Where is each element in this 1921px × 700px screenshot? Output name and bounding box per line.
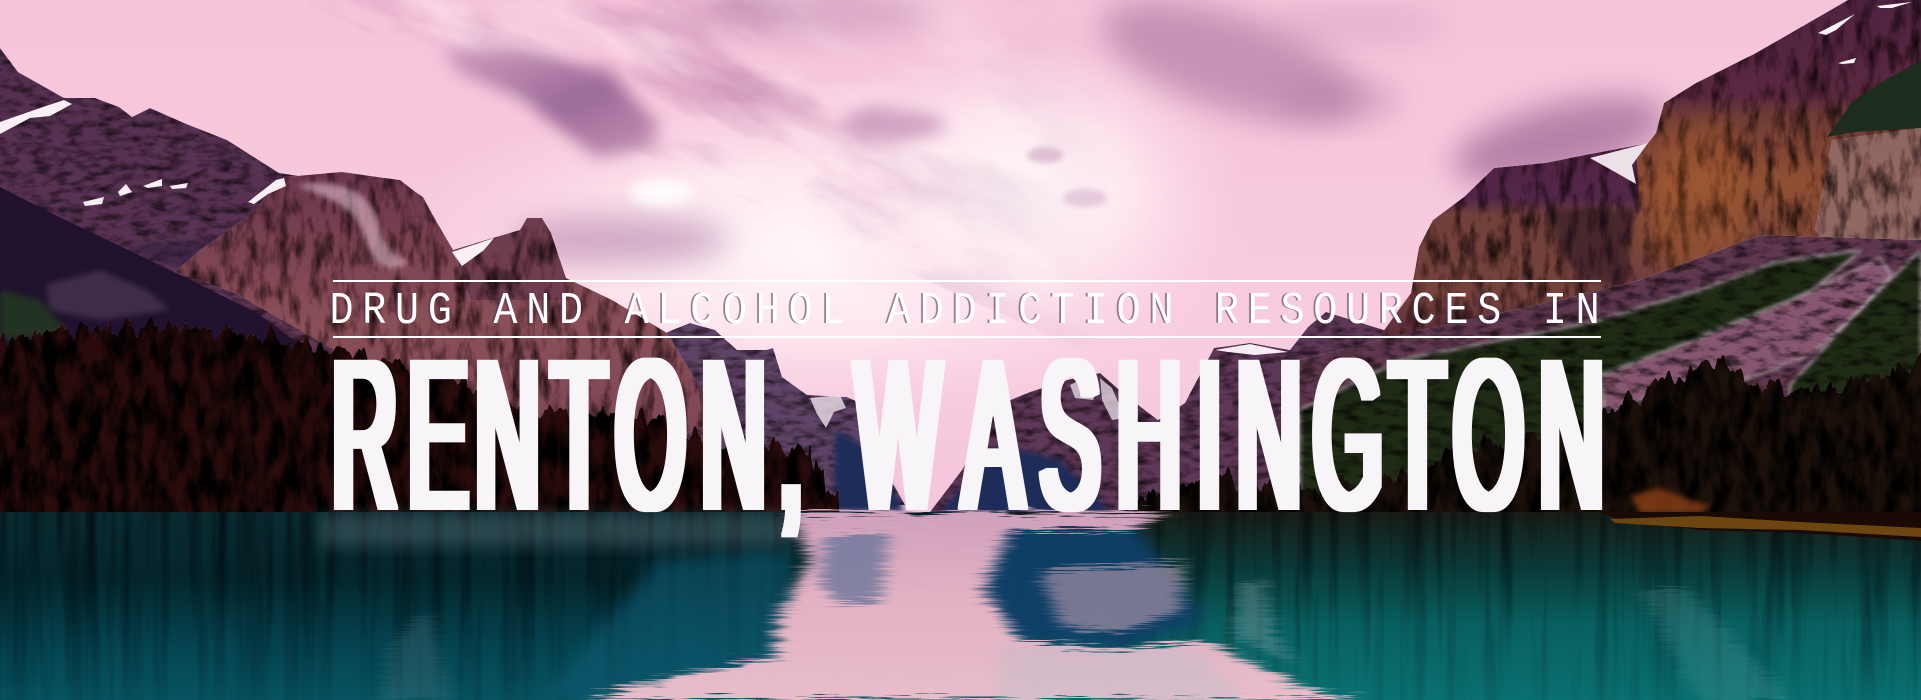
distant mountains in the centre	[660, 300, 1440, 512]
orange rock streaks	[1650, 120, 1750, 280]
dark strata on second cliff	[1550, 208, 1635, 285]
blue mixing column	[820, 535, 890, 605]
snow on the left mountain	[0, 100, 494, 266]
far right green slope	[1790, 250, 1921, 420]
distant lower navy slopes	[835, 430, 1110, 512]
dark shoreline reflections	[0, 512, 1921, 700]
pale cliff face	[1815, 128, 1921, 258]
bright cloud highlight	[630, 178, 694, 206]
background sky	[342, 0, 1672, 400]
right mountain cliffs	[1290, 0, 1921, 540]
dark green tree patch on cliff	[1827, 60, 1921, 137]
lake water	[0, 512, 1921, 700]
pale reflection streaks	[1040, 562, 1185, 635]
wisp of cloud	[296, 183, 408, 268]
dark clouds	[441, 0, 1675, 264]
dark forested ridge on the left	[0, 187, 400, 420]
dark band under the mountain	[124, 232, 275, 268]
subtitle: DRUG AND ALCOHOL ADDICTION RESOURCES IN	[329, 285, 1608, 337]
pink talus band	[1600, 258, 1892, 420]
mountain snow patches	[810, 344, 1288, 428]
forest middle and right shoreline	[1130, 360, 1921, 530]
forest left shoreline	[0, 325, 842, 530]
right cliff reflection	[1640, 590, 1790, 700]
blue reflection zones	[540, 550, 800, 700]
snow on the right cliffs	[1590, 2, 1912, 184]
pale grey reflection at bottom	[1000, 645, 1240, 700]
left spire	[453, 218, 570, 300]
green forested slopes	[1300, 250, 1862, 510]
left reflection highlight	[380, 610, 450, 700]
main title: RENTON, WASHINGTON	[332, 314, 1604, 554]
left mountain lower rock buttress	[175, 172, 720, 470]
left mountain range	[0, 48, 720, 480]
sloping purple slope below the cliffs	[1290, 235, 1921, 520]
lake surface shimmer left	[320, 514, 790, 546]
pink sky reflection	[585, 512, 1360, 700]
right shore	[1600, 512, 1921, 541]
